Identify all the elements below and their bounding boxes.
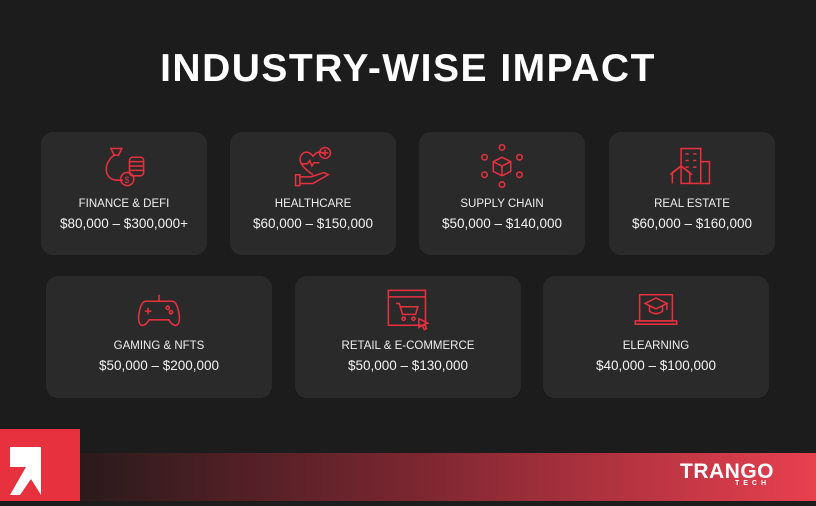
card: elearning: $40,000 – $100,000 <box>596 358 716 373</box>
footer bar <box>80 453 816 501</box>
card: supply chain <box>419 132 585 255</box>
logo mark <box>0 429 80 501</box>
logo text: TRANGO <box>680 460 774 483</box>
card: healthcare: HEALTHCARE <box>275 198 351 210</box>
icon: money bag <box>106 148 144 186</box>
card: supply chain: $50,000 – $140,000 <box>442 216 562 231</box>
card: gaming <box>46 276 272 398</box>
card: real estate: $60,000 – $160,000 <box>632 216 752 231</box>
icon: gamepad <box>138 294 180 326</box>
card: finance <box>41 132 207 255</box>
card: finance: $80,000 – $300,000+ <box>60 216 188 231</box>
logo text: TECH <box>735 480 770 487</box>
card: real estate <box>609 132 775 255</box>
card: gaming: GAMING & NFTS <box>114 340 204 352</box>
card: healthcare <box>230 132 396 255</box>
icon: buildings <box>670 148 710 184</box>
card: supply chain: SUPPLY CHAIN <box>460 198 544 210</box>
card: elearning: ELEARNING <box>623 340 689 352</box>
card: retail: $50,000 – $130,000 <box>348 358 468 373</box>
card: healthcare: $60,000 – $150,000 <box>253 216 373 231</box>
card: elearning <box>543 276 769 398</box>
title: INDUSTRY-WISE IMPACT <box>160 47 656 90</box>
card: finance: FINANCE & DEFI <box>79 198 169 210</box>
icon: browser cart <box>388 290 430 331</box>
icon: heart hand <box>294 146 332 186</box>
card: gaming: $50,000 – $200,000 <box>99 358 219 373</box>
card: retail: RETAIL & E-COMMERCE <box>342 340 474 352</box>
icon: laptop cap <box>634 294 678 325</box>
card: retail <box>295 276 521 398</box>
icon: network box <box>481 144 523 188</box>
card: real estate: REAL ESTATE <box>654 198 730 210</box>
icon: money bag: $ <box>125 175 130 185</box>
